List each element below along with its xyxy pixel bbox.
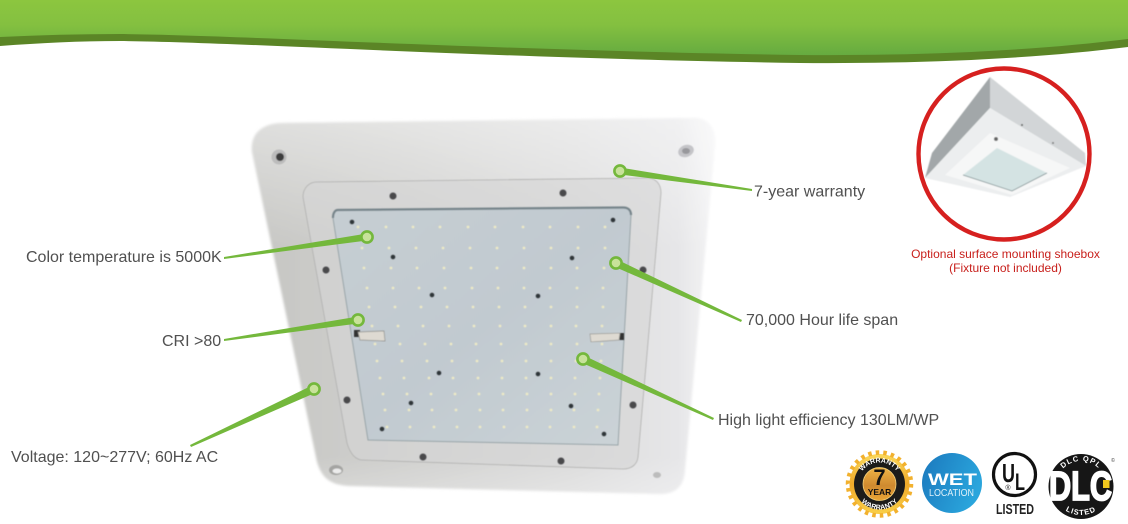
callout: life span: 70,000 Hour life span	[746, 312, 898, 329]
badge: UL listed: ®	[1005, 484, 1011, 492]
inset: optional surface mounting shoebox: (Fixture not included)	[949, 261, 1062, 275]
header wave band	[0, 0, 1128, 63]
callout: voltage: Voltage: 120~277V; 60Hz AC	[11, 449, 218, 466]
fixture body	[252, 118, 715, 494]
LED dots	[358, 227, 605, 427]
callout: light efficiency	[577, 353, 939, 429]
callout: 7-year warranty	[614, 165, 865, 200]
badge: DLC QPL listed	[1048, 454, 1115, 519]
badge: UL listed: L	[1015, 469, 1025, 496]
badge: 7 year warranty: WARRANTY	[862, 498, 896, 510]
callout: color temperature: Color temperature is 5000K	[26, 249, 222, 266]
badge: wet location: WET	[928, 470, 978, 489]
panel screws	[352, 220, 613, 434]
right bracket	[590, 333, 624, 342]
product photo: LED canopy fixture	[252, 118, 715, 494]
left bracket	[354, 330, 385, 341]
callout: light efficiency: High light efficiency 130LM/WP	[718, 412, 939, 429]
LED panel	[333, 208, 631, 445]
badge: DLC QPL listed: ©	[1111, 457, 1115, 464]
badge: UL listed	[994, 454, 1036, 518]
badge: DLC QPL listed: LISTED	[1066, 506, 1095, 515]
mounting frame	[303, 178, 661, 469]
callout: 7-year warranty: 7-year warranty	[754, 184, 865, 200]
callout: voltage	[11, 383, 320, 466]
badge: wet location: LOCATION	[929, 488, 974, 499]
badge: wet location	[922, 453, 982, 513]
frame screws	[326, 193, 643, 461]
inset: optional surface mounting shoebox	[911, 68, 1100, 275]
corner holes	[272, 143, 696, 478]
badge: 7 year warranty: YEAR	[868, 487, 891, 497]
badge: 7 year warranty: 7	[873, 465, 886, 490]
badge: UL listed: U	[1002, 458, 1015, 488]
badge: DLC QPL listed: DLC QPL	[1060, 456, 1100, 468]
badge: UL listed: LISTED	[996, 501, 1034, 518]
inset caption: Optional surface mounting shoebox	[911, 247, 1100, 261]
callout: CRI	[162, 314, 364, 350]
badge: 7 year warranty: WARRANTY	[858, 458, 900, 470]
shoebox illustration	[925, 77, 1086, 197]
callout: life span	[610, 257, 898, 329]
badge: 7 year warranty	[846, 450, 914, 518]
callout: CRI: CRI >80	[162, 333, 221, 350]
red circle	[918, 68, 1090, 240]
callout: color temperature	[26, 231, 373, 266]
